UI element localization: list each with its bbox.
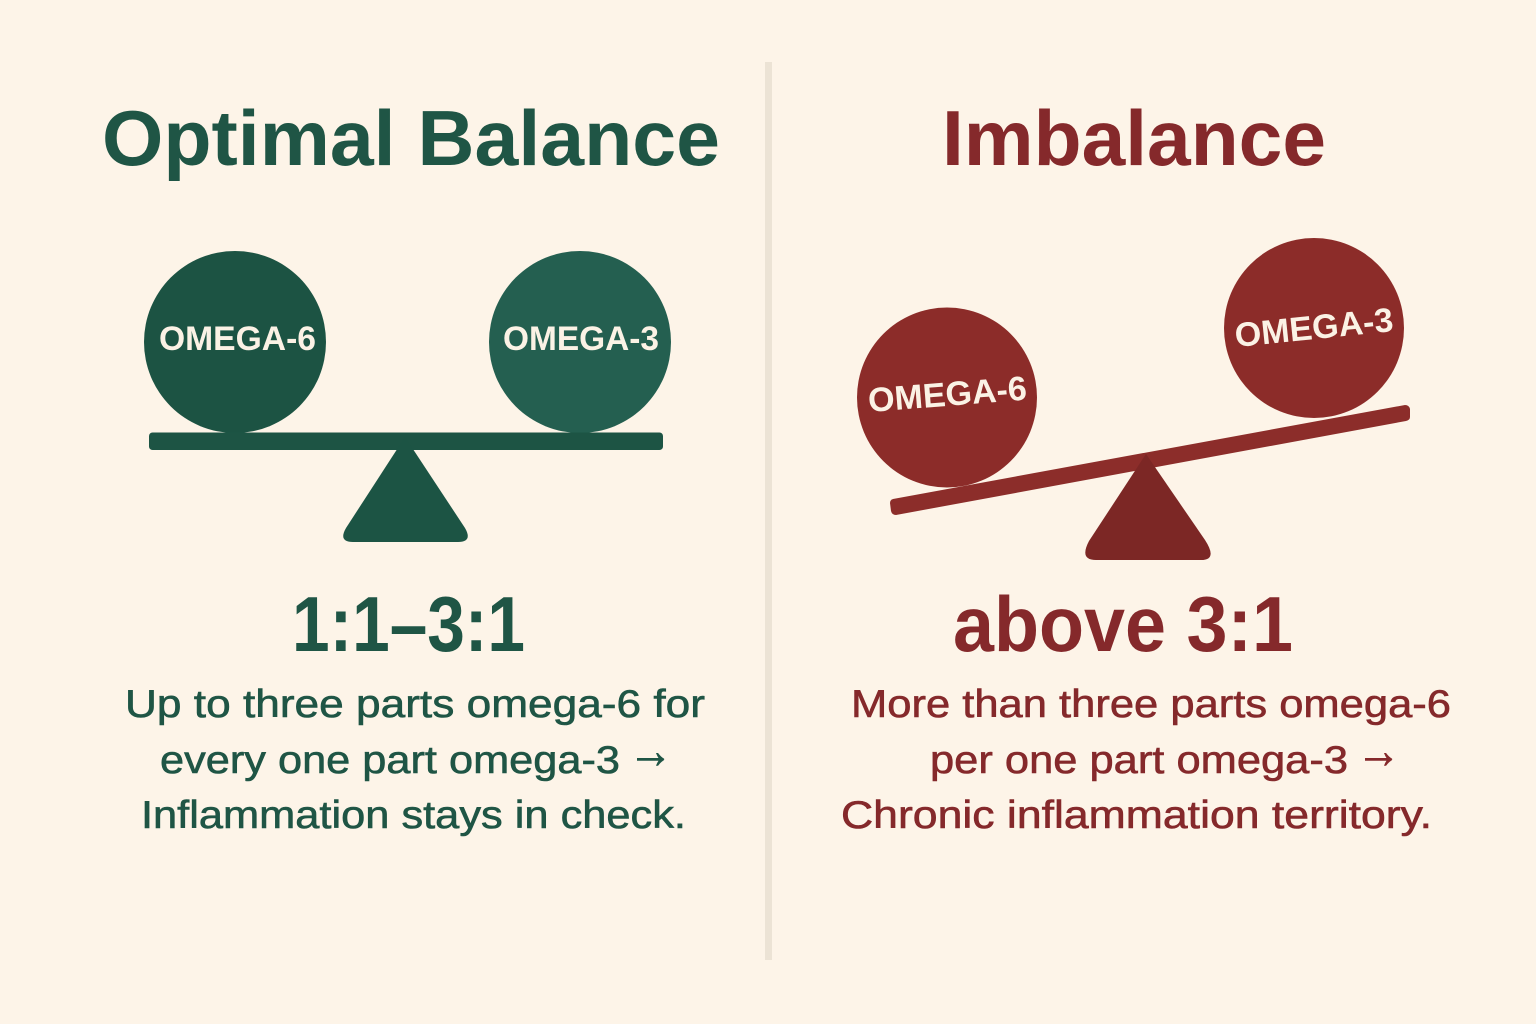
description: Chronic inflammation territory.: [841, 794, 1432, 837]
ball: omega-6: OMEGA-6: [159, 320, 316, 358]
ratio: above 3:1: above 3:1: [953, 580, 1293, 668]
beam: [149, 432, 663, 450]
ball: omega-6: [144, 251, 326, 433]
description: Up to three parts omega-6 for: [125, 683, 705, 726]
ratio: 1:1-3:1: 1:1–3:1: [292, 580, 525, 668]
description: →: [628, 722, 673, 780]
heading: optimal balance: Optimal Balance: [102, 94, 720, 182]
tilted scale: [857, 238, 1410, 560]
fulcrum: [1085, 454, 1211, 560]
beam: [890, 405, 1410, 515]
ball: omega-6: [857, 308, 1037, 488]
ball: omega-3: OMEGA-3: [503, 320, 659, 358]
ball: omega-3: [1224, 238, 1404, 418]
description: [125, 683, 705, 837]
description: More than three parts omega-6: [851, 683, 1451, 726]
description: [841, 683, 1451, 837]
panel: optimal balance: [102, 94, 720, 837]
description: every one part omega-3: [160, 739, 620, 782]
balanced scale: [144, 251, 671, 542]
heading: imbalance: Imbalance: [942, 94, 1326, 182]
ball: omega-3: [489, 251, 671, 433]
description: →: [1356, 722, 1401, 780]
description: per one part omega-3: [930, 739, 1348, 782]
fulcrum: [343, 437, 468, 542]
description: Inflammation stays in check.: [141, 794, 686, 837]
panel: imbalance: [841, 94, 1451, 837]
ball: omega-6: OMEGA-6: [867, 370, 1028, 420]
ball: omega-3: OMEGA-3: [1233, 301, 1395, 355]
